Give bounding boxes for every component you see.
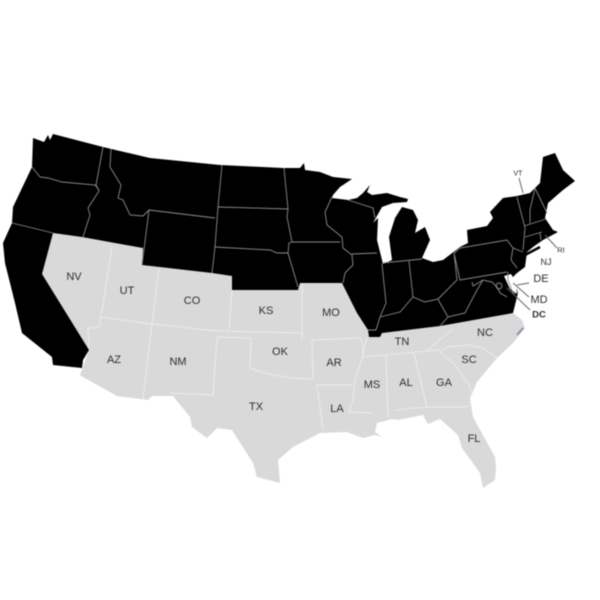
state labels: TN	[395, 336, 409, 348]
state labels: SC	[461, 354, 477, 366]
state labels: MD	[530, 294, 548, 306]
state labels: UT	[120, 285, 135, 297]
Long Island	[525, 247, 540, 255]
state labels: RI	[557, 246, 565, 254]
state labels: NM	[169, 356, 187, 368]
outer banks inlet	[517, 328, 523, 335]
state labels: MS	[364, 379, 380, 391]
state labels: AL	[399, 377, 413, 389]
leader lines for small states	[507, 178, 557, 310]
state labels: KS	[259, 305, 273, 317]
state labels: GA	[436, 377, 453, 389]
black state borders	[12, 147, 547, 330]
state labels: NV	[66, 271, 82, 283]
state labels: TX	[249, 401, 264, 413]
state labels	[66, 170, 565, 445]
state labels: DE	[533, 273, 549, 285]
state labels: VT	[514, 170, 523, 178]
state labels: FL	[468, 433, 480, 445]
state labels: DC	[532, 310, 546, 320]
southern region: gray states	[42, 233, 525, 488]
gray state borders	[88, 247, 497, 430]
state labels: MO	[322, 307, 340, 319]
Chesapeake Bay	[504, 274, 517, 294]
state labels: AZ	[107, 354, 121, 366]
state labels: CO	[184, 295, 201, 307]
state labels: NJ	[540, 257, 552, 267]
state labels: NC	[477, 327, 493, 339]
state labels: LA	[330, 403, 344, 415]
northern region: black states	[3, 134, 575, 368]
state labels: OK	[272, 346, 289, 358]
state labels: AR	[326, 357, 342, 369]
